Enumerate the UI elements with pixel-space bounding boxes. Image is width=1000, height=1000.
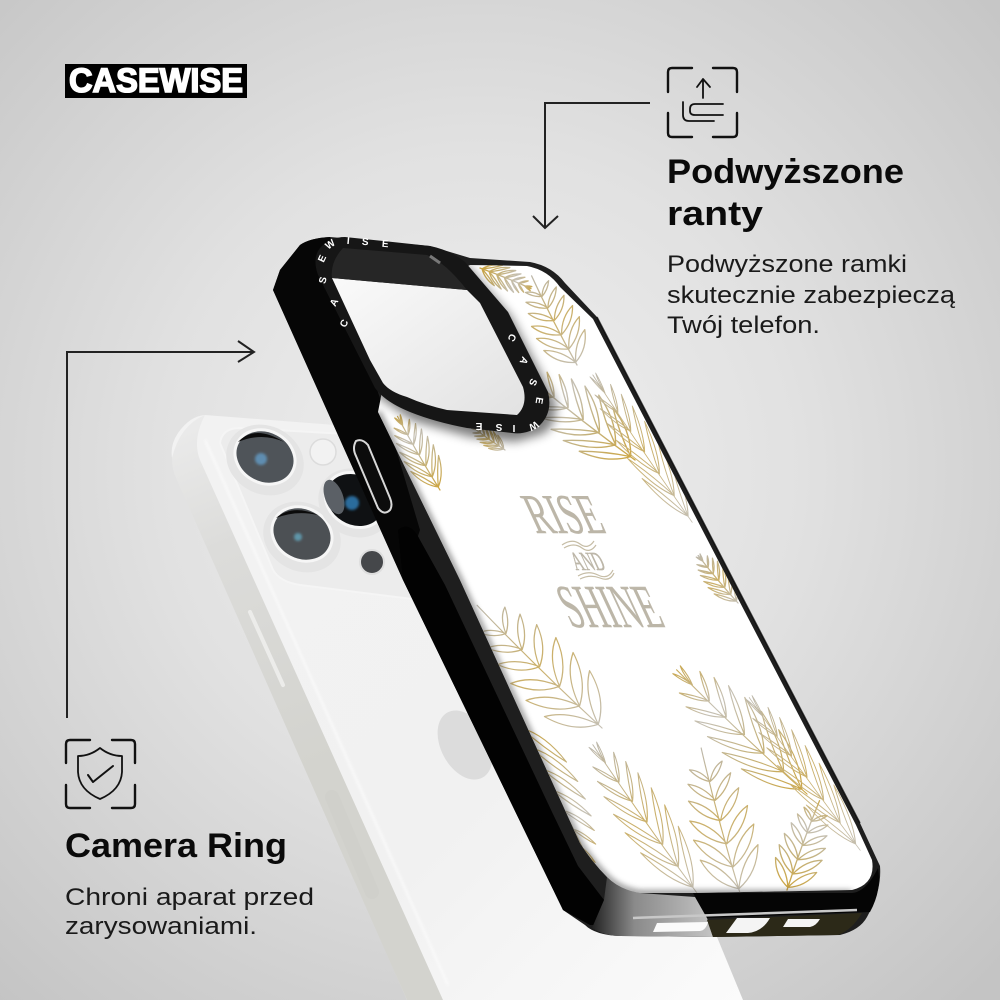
leaf frond: large center <box>544 372 636 461</box>
description: raised edges: Twój telefon. <box>667 312 820 339</box>
right edge line <box>597 317 860 823</box>
case: black clear phone case <box>273 236 880 937</box>
side button: lower <box>332 797 372 892</box>
ring opening <box>332 278 525 415</box>
icon: shield with check <box>66 740 135 808</box>
artwork title: Rise and Shine: RISE <box>513 483 614 545</box>
apple logo <box>426 701 504 789</box>
bottom black strip <box>693 868 879 918</box>
back phone: white iPhone <box>172 411 743 1000</box>
artwork title: Rise and Shine: SHINE <box>546 573 673 640</box>
description: raised edges: skutecznie zabezpieczą <box>667 282 956 309</box>
side slot <box>398 527 628 925</box>
leaf frond: top right <box>524 275 586 366</box>
ring lettering: A <box>517 354 530 366</box>
ring inner wall <box>332 248 467 290</box>
ring lettering: W <box>324 237 338 252</box>
bottom olive section <box>707 913 862 937</box>
description: raised edges: Podwyższone ramki <box>667 251 907 278</box>
heading: Camera Ring: Camera Ring <box>65 827 287 865</box>
ring lettering: S <box>317 275 330 285</box>
phone body <box>172 415 743 1000</box>
camera ring <box>315 236 549 433</box>
ring lettering: S <box>495 421 502 432</box>
flash <box>310 439 336 465</box>
lidar sensor <box>360 550 384 574</box>
ring lettering: E <box>381 239 389 250</box>
heading: Podwyższone ranty: ranty <box>667 195 763 233</box>
side button: upper <box>250 612 283 685</box>
ring lettering: E <box>316 253 329 264</box>
leaf frond: lower right large <box>672 665 808 795</box>
lens: bottom <box>251 488 353 586</box>
leaf frond: middle left <box>476 604 603 729</box>
phone side band <box>172 415 443 1000</box>
artwork title: Rise and Shine <box>513 483 673 640</box>
bottom strip highlight <box>633 910 857 918</box>
ring drop shadow <box>380 265 562 448</box>
ring inner wall highlight <box>430 256 440 263</box>
ring lettering <box>316 236 544 433</box>
bottom glass section <box>592 877 713 937</box>
ring lettering: S <box>361 237 369 248</box>
speaker cutout: right <box>783 919 820 927</box>
camera plateau <box>220 428 420 600</box>
ring lettering: S <box>526 377 539 387</box>
leaf frond: top behind ring <box>479 265 532 294</box>
description: camera ring: Chroni aparat przed <box>65 884 314 911</box>
heading: Podwyższone ranty <box>667 153 904 233</box>
description: camera ring: zarysowaniami. <box>65 913 257 940</box>
side button outline <box>354 440 392 513</box>
logo: CASEWISE: CASEWISE <box>69 62 243 100</box>
ring lettering: I <box>512 422 515 433</box>
ring lettering: I <box>346 236 350 247</box>
upper shell shade <box>273 237 420 580</box>
feature: raised edges <box>667 68 956 339</box>
ring lettering: C <box>338 318 351 330</box>
ring lettering: E <box>475 420 482 431</box>
artwork title: Rise and Shine: AND <box>565 547 610 576</box>
port cutout: center <box>726 918 770 933</box>
side band highlight <box>205 440 448 985</box>
leaf frond: bottom middle <box>687 747 759 892</box>
heading: Podwyższone ranty: Podwyższone <box>667 153 904 191</box>
arrow: to camera ring <box>67 341 254 718</box>
leaf frond: right edge <box>590 372 693 523</box>
leaf frond: small under ring <box>470 428 506 451</box>
ring body <box>315 237 549 433</box>
ring lettering: E <box>532 396 544 405</box>
ring lettering: C <box>505 331 518 343</box>
lens: right <box>305 455 405 551</box>
speaker cutout: left <box>653 922 708 932</box>
leaf frond: under ring <box>394 414 442 491</box>
description: camera ring <box>65 884 314 940</box>
printed artwork: leaves <box>378 265 861 893</box>
feature: camera ring <box>65 740 314 940</box>
ring lettering: A <box>328 297 341 309</box>
case screen: white back panel <box>378 265 873 893</box>
leaf frond: lower center <box>588 742 698 893</box>
description: raised edges <box>667 251 956 339</box>
lens: top left <box>214 411 316 509</box>
left edge inner shadow <box>378 412 852 893</box>
leaf frond: bottom right <box>774 800 828 891</box>
case outer shell <box>273 237 880 937</box>
leaf frond: lower right edge <box>746 695 861 851</box>
leaf frond: band edge <box>528 730 596 863</box>
leaf frond: small right edge <box>696 553 739 604</box>
ring lettering: W <box>526 418 540 433</box>
icon: raised layers with up arrow <box>668 68 737 137</box>
arrow: to raised edges <box>533 103 650 228</box>
